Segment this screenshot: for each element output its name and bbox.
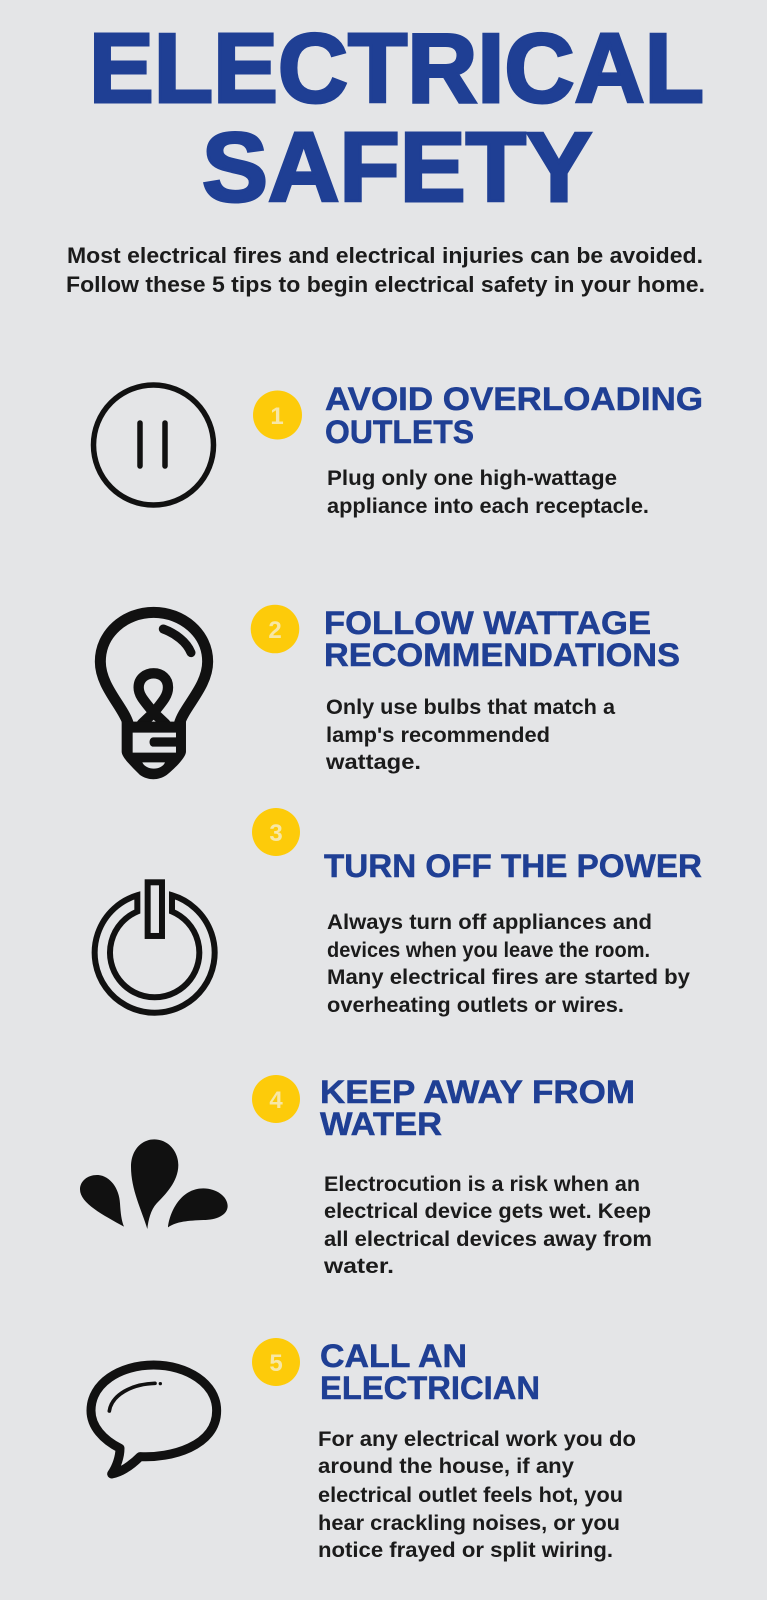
icon: outlet (94, 385, 214, 505)
heading 2: FOLLOW WATTAGE (324, 605, 651, 641)
intro text: Follow these 5 tips to begin electrical safety in your home. (66, 272, 705, 297)
text 5: For any electrical work you do (318, 1428, 636, 1451)
heading 5: ELECTRICIAN (320, 1370, 540, 1406)
intro text (66, 243, 705, 297)
text 3: Many electrical fires are started by (327, 966, 690, 989)
panel: tip 2 (100, 605, 680, 779)
text 3: devices when you leave the room. (327, 939, 650, 962)
heading 2: RECOMMENDATIONS (324, 637, 680, 673)
badge 2: 2 (268, 617, 282, 644)
badge 1 (253, 390, 302, 440)
panel: tip 4 (80, 1074, 652, 1278)
badge 3: 3 (269, 820, 283, 847)
text 3 (327, 911, 690, 1017)
icon: speech bubble (91, 1365, 217, 1474)
text 4: water. (323, 1255, 394, 1278)
badge 5: 5 (269, 1350, 283, 1377)
heading 5: CALL AN (320, 1338, 467, 1374)
badge 4: 4 (269, 1087, 283, 1114)
text 4: electrical device gets wet. Keep (324, 1200, 651, 1223)
text 5 (318, 1428, 636, 1562)
text 2: lamp's recommended (326, 724, 550, 747)
heading 4: WATER (320, 1106, 442, 1142)
text 4: all electrical devices away from (324, 1228, 652, 1251)
text 4 (323, 1173, 652, 1278)
text 1 (327, 467, 649, 518)
heading 4 (320, 1074, 635, 1142)
text 1: appliance into each receptacle. (327, 495, 649, 518)
heading 4: KEEP AWAY FROM (320, 1074, 635, 1110)
text 2 (325, 696, 615, 774)
badge 3 (252, 808, 300, 856)
badge 4 (252, 1075, 300, 1123)
badge 1: 1 (270, 403, 284, 430)
heading 1: AVOID OVERLOADING (325, 381, 703, 417)
text 2: Only use bulbs that match a (326, 696, 615, 719)
heading 1 (325, 381, 703, 450)
text 2: wattage. (325, 751, 421, 774)
badge 5 (252, 1338, 300, 1386)
heading 3: TURN OFF THE POWER (324, 848, 702, 884)
heading 5 (320, 1338, 540, 1406)
text 4: Electrocution is a risk when an (324, 1173, 640, 1196)
intro text: Most electrical fires and electrical injuries can be avoided. (67, 243, 703, 268)
title (89, 13, 704, 222)
panel: tip 1 (94, 381, 703, 518)
text 5: electrical outlet feels hot, you (318, 1484, 623, 1507)
text 3: Always turn off appliances and (327, 911, 652, 934)
text 5: hear crackling noises, or you (318, 1512, 620, 1535)
title: ELECTRICAL (89, 13, 704, 123)
text 3: overheating outlets or wires. (327, 994, 624, 1017)
text 5: notice frayed or split wiring. (318, 1539, 613, 1562)
text 1: Plug only one high-wattage (327, 467, 617, 490)
icon: light bulb (100, 612, 208, 779)
panel: tip 3 (95, 808, 702, 1017)
text 5: around the house, if any (318, 1455, 574, 1478)
icon: power button (95, 882, 215, 1013)
panel: tip 5 (91, 1338, 636, 1562)
icon: water drops (80, 1139, 228, 1229)
heading 1: OUTLETS (325, 414, 474, 450)
heading 2 (324, 605, 680, 673)
badge 2 (251, 605, 299, 653)
title: SAFETY (202, 112, 592, 222)
